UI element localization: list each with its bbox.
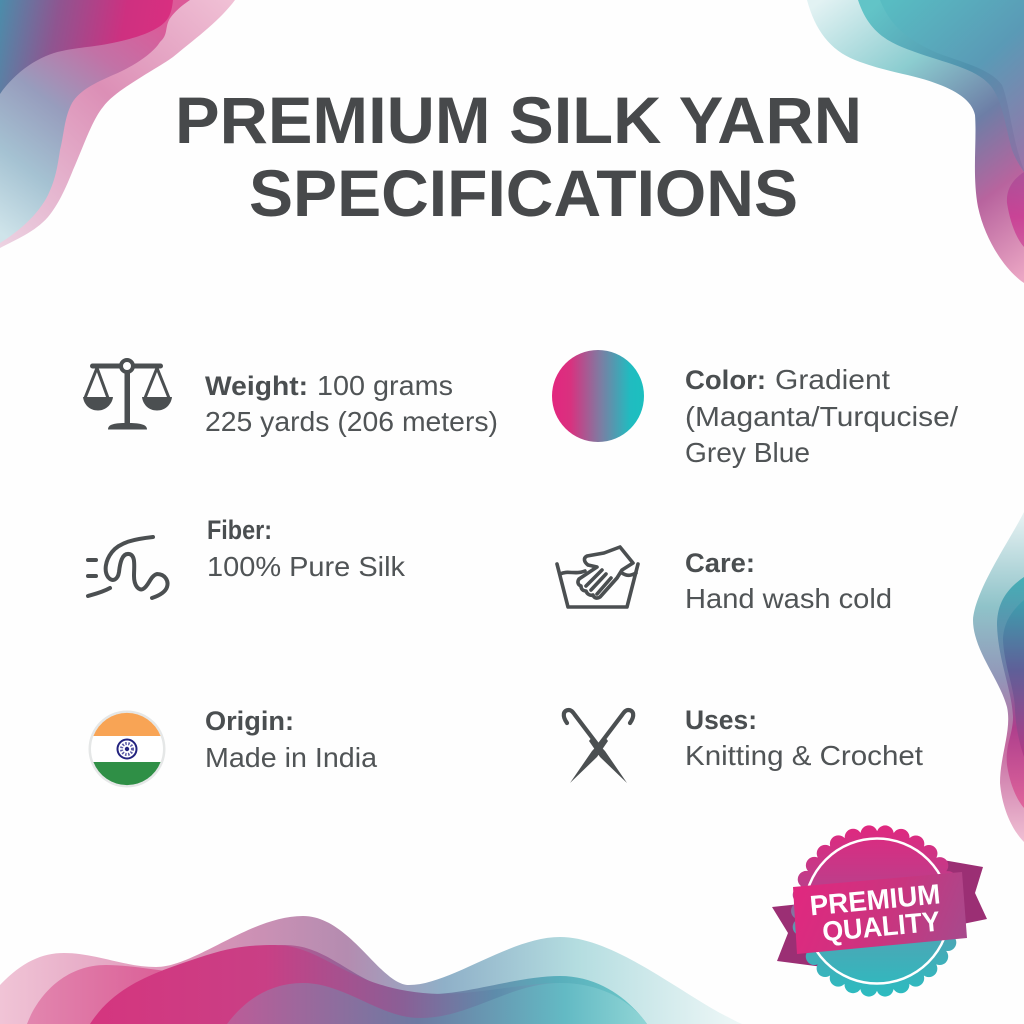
icon: balance scale — [83, 360, 172, 430]
fiber text: 100% Pure Silk — [207, 551, 406, 582]
uses text: Uses: — [685, 705, 757, 735]
icon: India flag — [88, 710, 166, 788]
fiber text — [207, 515, 406, 582]
origin text: Origin: — [205, 706, 294, 736]
uses text: Knitting & Crochet — [685, 740, 923, 771]
uses text — [685, 705, 923, 771]
ribbon band — [793, 872, 967, 954]
decorative wave: top left corner — [0, 0, 235, 248]
color text: (Maganta/Turqucise/ — [685, 401, 958, 432]
badge text: QUALITY — [821, 906, 942, 947]
premium quality badge — [772, 831, 987, 991]
spec: care — [557, 547, 892, 614]
badge text: PREMIUM — [808, 878, 942, 921]
decorative wave: right edge — [973, 512, 1024, 842]
care text: Care: — [685, 548, 755, 578]
color text — [685, 364, 958, 468]
icon: crossed needles with hooks — [564, 710, 633, 783]
icon: silk thread — [88, 537, 168, 598]
origin text: Made in India — [205, 742, 377, 773]
color text: Grey Blue — [685, 437, 810, 468]
badge text — [808, 878, 944, 948]
color text: Color: — [685, 365, 766, 395]
color text: Gradient — [775, 364, 890, 395]
icon: gradient swatch — [552, 350, 644, 442]
icon: hand wash tub — [557, 547, 638, 607]
weight text: 225 yards (206 meters) — [205, 406, 498, 437]
weight text: 100 grams — [317, 370, 453, 401]
spec: weight — [83, 360, 498, 437]
fiber text: Fiber: — [207, 515, 272, 545]
title: PREMIUM SILK YARN — [175, 83, 862, 157]
decorative wave: bottom — [0, 916, 742, 1024]
scalloped seal — [797, 831, 957, 991]
title: SPECIFICATIONS — [249, 156, 798, 230]
weight text — [205, 370, 498, 437]
spec: fiber — [88, 515, 406, 598]
title — [175, 83, 862, 230]
origin text — [205, 706, 377, 773]
care text: Hand wash cold — [685, 583, 892, 614]
ribbon tails — [772, 860, 987, 967]
weight text: Weight: — [205, 371, 308, 401]
spec: origin — [88, 706, 377, 788]
decorative wave: top right corner — [807, 0, 1024, 283]
care text — [685, 548, 892, 614]
spec: uses — [564, 705, 923, 783]
spec: color — [552, 350, 958, 468]
